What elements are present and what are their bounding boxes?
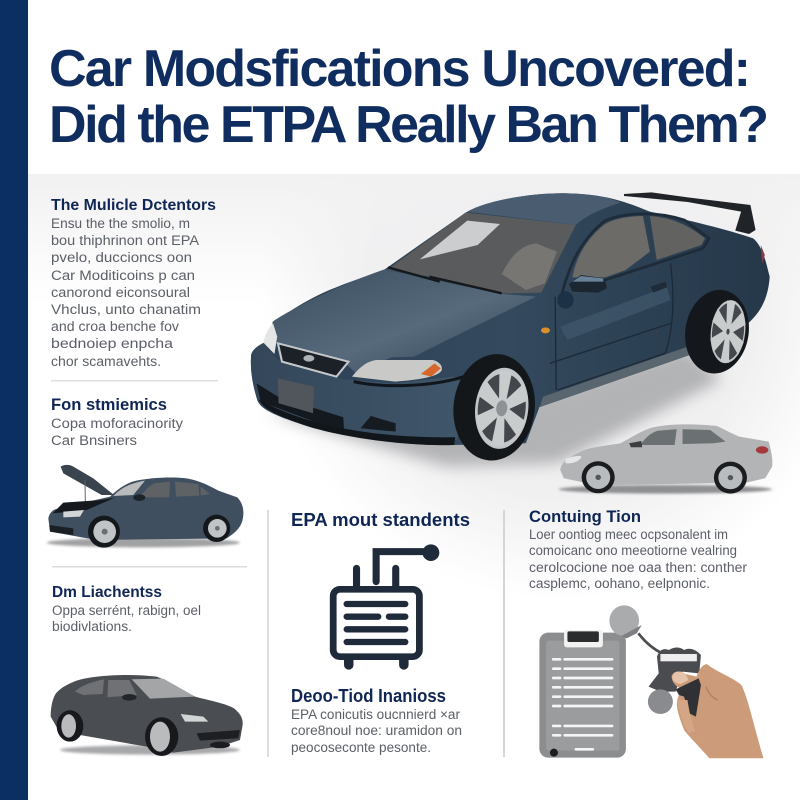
icon: side windows bbox=[572, 216, 650, 277]
icon: fog lamp bbox=[361, 416, 396, 432]
icon: hood bbox=[272, 269, 536, 373]
text block: the mulicle dctentors: bou thiphrinon ont EPA bbox=[51, 233, 199, 248]
icon: window trim bbox=[562, 214, 709, 293]
navy sidebar bbox=[0, 0, 28, 800]
illustration: clipboard, key fob and hand bbox=[539, 605, 763, 758]
text block: deoo-tiod inanioss bbox=[291, 686, 462, 755]
headlight bbox=[181, 714, 208, 722]
headlight bbox=[63, 510, 84, 517]
text block: contuing tion: comoicanc ono meeotiorne vealring bbox=[529, 543, 737, 558]
windows bbox=[113, 481, 145, 496]
text block: contuing tion: cerolcocione noe oaa then: conther bbox=[529, 560, 748, 575]
icon: front bumper bbox=[251, 343, 467, 443]
icon: rear wheel bbox=[680, 286, 754, 378]
mirror bbox=[133, 494, 145, 501]
title bbox=[49, 40, 769, 154]
content glow behind main car bbox=[28, 174, 800, 604]
ground shadow bbox=[268, 347, 722, 467]
icon: side mirror bbox=[569, 275, 607, 293]
divider: right column bbox=[503, 510, 505, 757]
text block: the mulicle dctentors: canorond eiconsoural bbox=[51, 285, 190, 300]
divider: left column bbox=[267, 510, 269, 757]
text block: contuing tion: Contuing Tion bbox=[529, 507, 641, 526]
text block: dm liachentss: biodivlations. bbox=[52, 619, 132, 634]
content top band bbox=[28, 174, 800, 304]
icon: car body bbox=[251, 193, 770, 445]
illustration: grey sedan, front right view bbox=[51, 675, 243, 756]
icon: tail light bbox=[761, 245, 765, 263]
text block: epa mout standents: EPA mout standents bbox=[291, 510, 470, 530]
icon: key fob with tag bbox=[609, 605, 701, 714]
icon: roof bbox=[467, 193, 621, 225]
text block: dm liachentss bbox=[52, 584, 201, 634]
text block: the mulicle dctentors: Vhclus, unto chanatim bbox=[51, 302, 201, 317]
icon: hand bbox=[672, 664, 763, 758]
body bbox=[51, 675, 243, 753]
icon: rear spoiler bbox=[624, 192, 756, 234]
text block: deoo-tiod inanioss: core8noul noe: uramidon on bbox=[291, 723, 462, 738]
engine bay bbox=[53, 498, 115, 513]
text block: contuing tion bbox=[529, 507, 748, 591]
icon: license plate bbox=[278, 378, 314, 413]
text block: the mulicle dctentors: bednoiep enpcha bbox=[51, 336, 174, 351]
text block: the mulicle dctentors: Ensu the the smolio, m bbox=[51, 216, 190, 231]
icon: clipboard bbox=[539, 630, 626, 758]
icon: wipers bbox=[388, 267, 502, 293]
icon: bumper crease bbox=[354, 377, 464, 386]
lower grille bbox=[197, 730, 240, 741]
text block: contuing tion: casplemc, oohano, eelpnonic. bbox=[529, 576, 710, 591]
wheels bbox=[88, 515, 230, 548]
text block: dm liachentss: Dm Liachentss bbox=[52, 584, 162, 601]
text block: fon stmiemics: Car Bnsiners bbox=[51, 433, 137, 448]
text block: deoo-tiod inanioss: EPA conicutis oucnnierd ×ar bbox=[291, 707, 460, 722]
text block: fon stmiemics: Fon stmiemics bbox=[51, 395, 167, 414]
icon: door lines bbox=[550, 263, 673, 390]
icon: sill bbox=[540, 347, 695, 407]
text block: dm liachentss: Oppa serrént, rabign, oel bbox=[52, 603, 201, 618]
icon: lower lip bbox=[259, 399, 455, 445]
icon: door highlight bbox=[560, 287, 670, 340]
icon: turn marker bbox=[541, 327, 550, 333]
text block: the mulicle dctentors: Car Moditicoins p can bbox=[51, 268, 195, 283]
illustration: dark sedan with open hood bbox=[47, 465, 243, 548]
icon: right headlight bbox=[352, 360, 442, 382]
lower bumper bbox=[49, 525, 73, 535]
icon: front wheel bbox=[448, 350, 540, 464]
icon: lower grille bbox=[257, 383, 344, 430]
title: Car Modsfications Uncovered: bbox=[49, 40, 751, 98]
body bbox=[48, 477, 243, 540]
title: Did the ETPA Really Ban Them? bbox=[49, 96, 769, 154]
shadow bbox=[60, 745, 240, 755]
icon: grille bbox=[278, 343, 348, 377]
text block: the mulicle dctentors bbox=[51, 197, 216, 369]
text block: the mulicle dctentors: The Mulicle Dctentors bbox=[51, 197, 216, 214]
windows bbox=[75, 679, 104, 695]
text block: fon stmiemics: Copa moforacinority bbox=[51, 416, 183, 431]
shadow bbox=[47, 538, 240, 547]
icon: radiator module with antenna bbox=[333, 544, 439, 665]
text block: contuing tion: Loer oontiog meec ocpsonalent im bbox=[529, 527, 728, 542]
text block: the mulicle dctentors: pvelo, duccioncs oon bbox=[51, 250, 192, 265]
text block: the mulicle dctentors: chor scamavehts. bbox=[51, 354, 161, 369]
text block: deoo-tiod inanioss: Deoo-Tiod Inanioss bbox=[291, 686, 446, 706]
text block: deoo-tiod inanioss: peocoseconte pesonte. bbox=[291, 740, 431, 755]
icon: windshield bbox=[388, 213, 576, 293]
mirror bbox=[122, 694, 137, 701]
text block: fon stmiemics bbox=[51, 395, 183, 448]
open hood bbox=[61, 465, 114, 495]
wheels bbox=[57, 710, 230, 756]
text block: the mulicle dctentors: and croa benche fov bbox=[51, 319, 179, 334]
illustration: main blue coupe with spoiler and small silver sedan bbox=[251, 192, 772, 494]
icon: left headlight bbox=[263, 323, 277, 354]
small silver sedan bbox=[559, 424, 772, 494]
icon: door handle bbox=[651, 282, 667, 293]
